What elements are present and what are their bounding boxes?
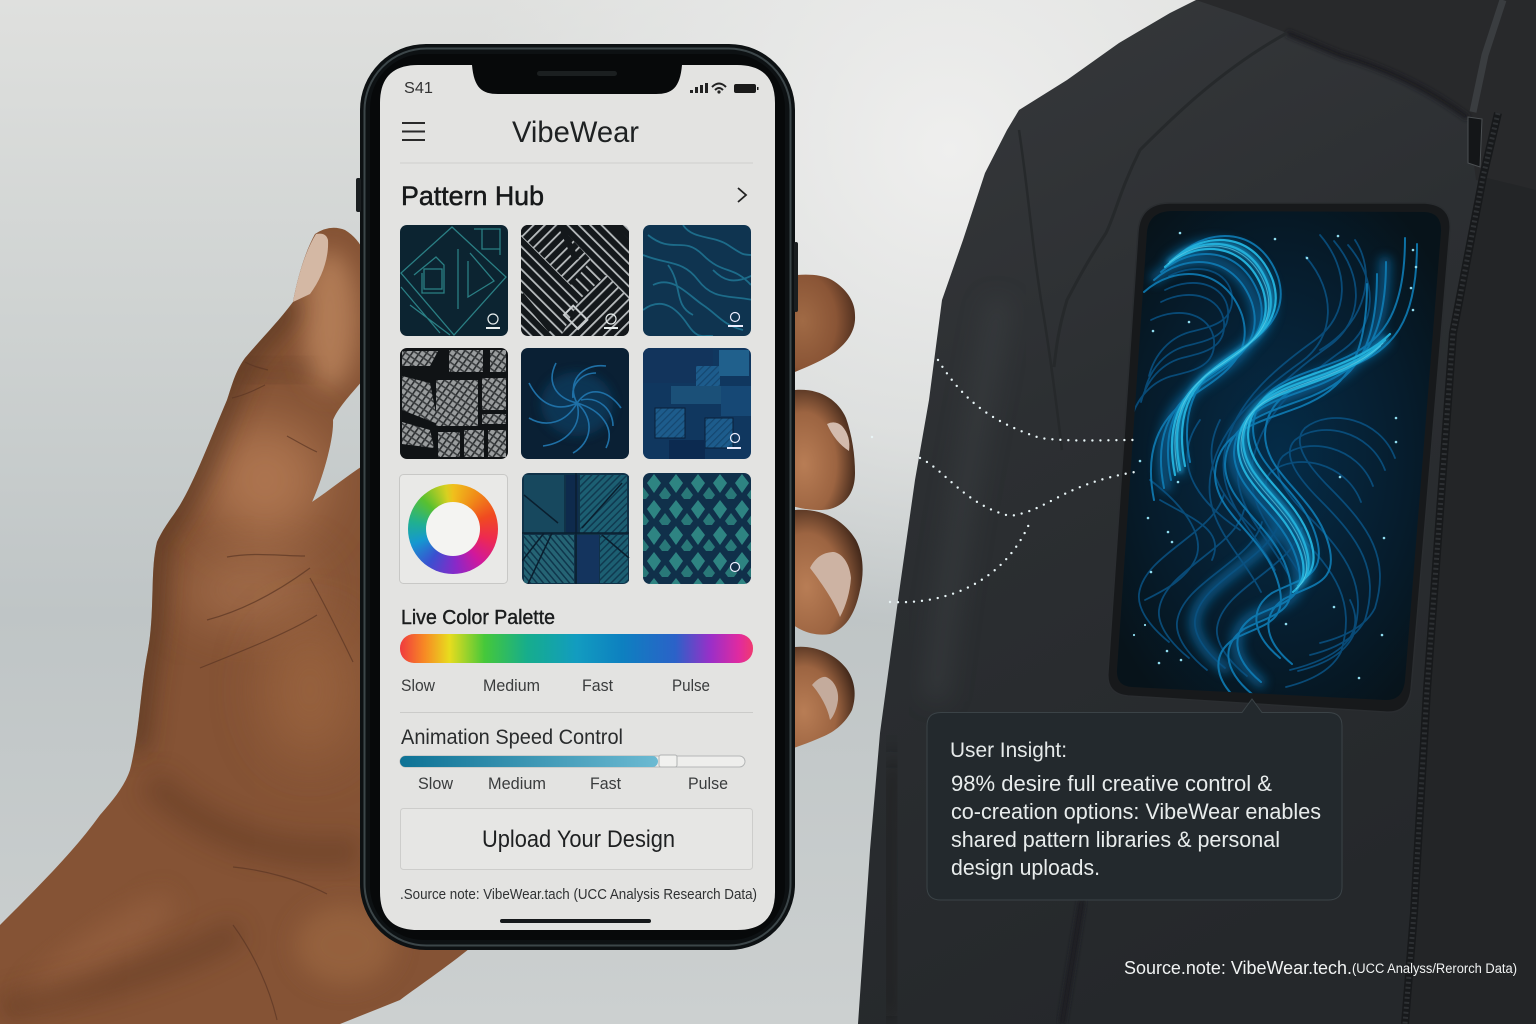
finger 2 xyxy=(780,390,855,510)
dotted connector lines xyxy=(872,360,1135,602)
finger 1 xyxy=(780,275,855,378)
status bar xyxy=(404,80,758,97)
palette labels xyxy=(401,676,710,695)
heading: Live Color Palette: Live Color Palette xyxy=(401,607,555,629)
callout: user insight: co-creation options: VibeWear enables xyxy=(951,799,1321,824)
finger 3 xyxy=(780,510,863,635)
speed labels xyxy=(418,775,728,793)
source note on jacket: (UCC Analyss/Rerorch Data) xyxy=(1352,961,1517,976)
heading: Pattern Hub: Pattern Hub xyxy=(401,181,544,211)
tile: teal diamonds xyxy=(643,473,753,584)
zipper xyxy=(1405,0,1503,1024)
upload button xyxy=(400,808,752,870)
hood xyxy=(1196,0,1536,190)
right jacket front xyxy=(1405,177,1536,1024)
tile: blue waves xyxy=(643,225,753,336)
speed labels: Medium xyxy=(488,775,546,793)
skin shading xyxy=(0,250,395,1020)
palette labels: Fast xyxy=(582,676,613,695)
zipper pull xyxy=(1468,117,1482,167)
callout: user insight: 98% desire full creative control & xyxy=(951,771,1272,796)
menu icon xyxy=(402,123,425,140)
tile: dark spiral xyxy=(521,348,630,459)
tile: geometric teal lines xyxy=(400,225,508,336)
palm and thumb xyxy=(0,228,480,1024)
tile: colour wheel xyxy=(400,474,508,584)
callout: user insight: User Insight: xyxy=(950,738,1067,762)
thumb nail xyxy=(293,234,328,302)
callout: user insight: shared pattern libraries & personal xyxy=(951,827,1280,852)
finger 4 xyxy=(780,647,855,752)
tile: white diagonal stripes xyxy=(521,225,630,336)
swirl pattern xyxy=(1131,235,1417,704)
callout: user insight xyxy=(927,699,1342,900)
heading: Animation Speed Control: Animation Speed Control xyxy=(401,726,623,749)
palette labels: Medium xyxy=(483,676,540,695)
source note on jacket xyxy=(1124,958,1517,978)
speed labels: Pulse xyxy=(688,775,728,793)
palette labels: Slow xyxy=(401,676,436,695)
jacket seams and folds xyxy=(889,33,1287,1024)
phone body xyxy=(360,44,795,950)
chevron xyxy=(738,188,746,202)
icon: colour wheel ring xyxy=(408,484,498,574)
tile: blue squares xyxy=(643,348,753,459)
sparkle dots xyxy=(1133,232,1417,679)
status bar: S41 xyxy=(404,80,433,97)
speed labels: Slow xyxy=(418,775,453,793)
speed slider xyxy=(400,755,745,767)
fingers xyxy=(780,275,863,752)
speed labels: Fast xyxy=(590,775,621,793)
tile: grey hatch blocks xyxy=(400,348,508,459)
phone xyxy=(356,44,798,950)
home indicator xyxy=(500,919,651,923)
tile: teal stained glass xyxy=(522,473,629,584)
source note on jacket: Source.note: VibeWear.tech. xyxy=(1124,958,1352,978)
jacket xyxy=(858,0,1536,1024)
glowing panel on jacket xyxy=(1108,203,1450,712)
rainbow colour bar xyxy=(400,634,753,663)
hand xyxy=(0,228,480,1024)
screen xyxy=(380,65,775,930)
upload button: Upload Your Design xyxy=(482,826,675,853)
phone source note: .Source note: VibeWear.tach (UCC Analysis Research Data) xyxy=(400,887,757,903)
palette labels: Pulse xyxy=(672,676,710,695)
palm creases xyxy=(200,362,353,1020)
callout: user insight: design uploads. xyxy=(951,855,1100,880)
app title: VibeWear xyxy=(512,116,639,149)
